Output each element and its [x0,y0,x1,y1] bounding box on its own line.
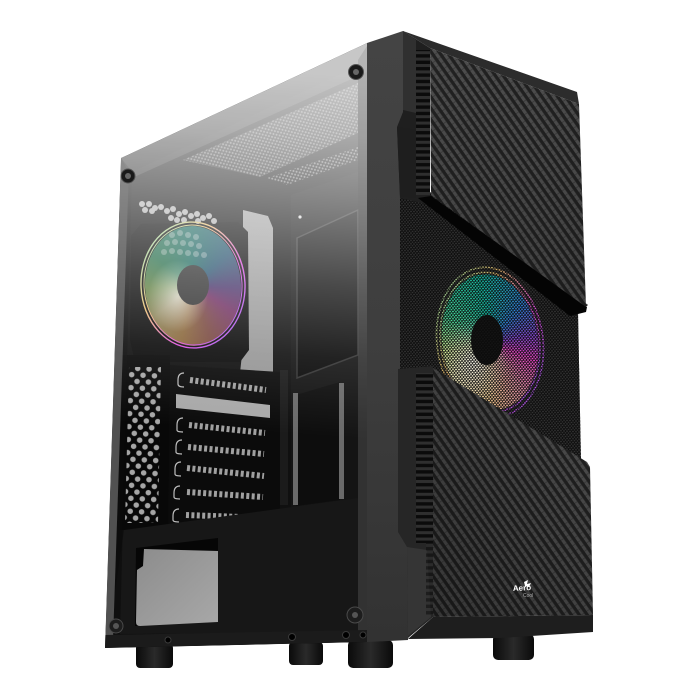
logo [513,580,533,599]
lower carbon panel [408,368,593,639]
glass fade reflection [114,43,367,410]
bottom glass band [105,630,367,648]
glass left edge highlight [105,158,129,648]
illustration: PC tower case [105,31,593,668]
interior: cable cut-out silver panel [240,210,273,378]
front recess lower [398,366,433,638]
side pillar [367,31,416,642]
fan rings [427,260,553,424]
fan hub [471,315,503,365]
interior: rear fan frame [241,227,249,360]
front RGB fan [427,260,553,424]
mesh grille [400,192,588,462]
fan glow [440,316,508,408]
glass screws [109,64,366,643]
side glass panel [105,43,367,648]
interior: PSU shroud [126,509,280,626]
bottom bevel [408,615,593,639]
interior: rear ventilation honeycomb [125,367,161,523]
interior: top perforated ceiling [183,83,358,185]
fan hub [177,265,209,305]
upper carbon panel [403,31,587,316]
panel top bevel [403,31,579,104]
PCIe ventilation rows [186,380,266,517]
logo: Cool [523,593,533,599]
PSU label plate [136,549,218,626]
intake fins lower [416,373,433,543]
rubber feet [136,634,534,668]
glass frosted top edge [122,89,298,176]
PCIe blank silver cover [176,394,270,418]
intake fins upper [416,50,430,195]
fan disc [142,224,244,348]
rear RGB fan [138,219,248,351]
fan rings [138,219,248,351]
interior: motherboard tray and drive bays [293,210,358,505]
fan glow [151,263,206,329]
panel carbon face [430,48,586,307]
fan disc [433,268,547,416]
front recess upper [397,31,434,206]
interior: rear fan honeycomb [139,201,217,224]
interior: PCIe slot covers [172,370,288,522]
PCIe brackets [173,373,184,522]
glass right edge highlight [358,46,367,640]
front mesh panel [400,192,588,462]
PSU window [135,538,218,626]
fan holes [161,230,207,258]
logo: Aero [513,583,531,593]
panel shadow [418,196,587,316]
glass printed frame [105,43,367,648]
